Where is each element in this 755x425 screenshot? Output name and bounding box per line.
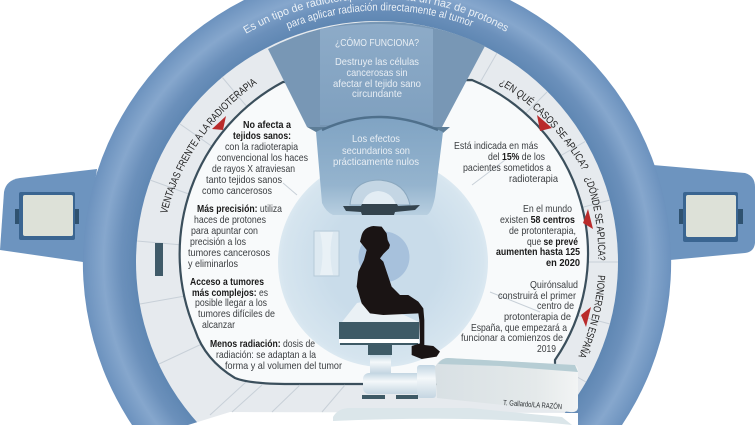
- text block: pioneer: construirá el primer: [498, 290, 576, 302]
- curved heading: cases: ¿EN QUÉ CASOS SE APLICA?: [499, 80, 588, 169]
- icon: red arrow left: [212, 116, 226, 130]
- text block: cases: radioterapia: [509, 173, 558, 185]
- text block: cases: [454, 140, 558, 185]
- text: how it works: Destruye las células: [335, 56, 419, 68]
- icon: red arrow where: [583, 209, 593, 229]
- text: side effects: prácticamente nulos: [333, 156, 419, 168]
- text block: where: [496, 203, 580, 269]
- floor lines: [232, 160, 540, 412]
- text block: cases: pacientes sometidos a: [463, 162, 551, 174]
- curved text: description: para aplicar radiación directamente al tumor: [286, 2, 474, 31]
- panel: how it works: [320, 24, 433, 125]
- text: how it works: circundante: [352, 88, 402, 100]
- text block: where: aumenten hasta 125: [496, 246, 580, 258]
- text block: advantages: para apuntar con: [191, 225, 258, 237]
- top wedge: [268, 22, 485, 127]
- text block: advantages: Menos radiación: dosis de: [210, 338, 315, 350]
- text block: advantages: tumores difíciles de: [198, 308, 275, 320]
- text block: pioneer: centro de: [537, 300, 574, 312]
- text block: advantages: [188, 119, 342, 372]
- text block: where: existen 58 centros: [500, 214, 575, 226]
- icon: red arrow pioneer: [581, 307, 591, 327]
- text block: advantages: tanto tejidos sanos: [206, 174, 282, 186]
- text block: advantages: con la radioterapia: [225, 141, 298, 153]
- treatment table: [339, 300, 419, 373]
- curved heading: advantages: VENTAJAS FRENTE A LA RADIOTERAPIA: [160, 79, 257, 212]
- text block: advantages: forma y al volumen del tumor: [225, 360, 342, 372]
- text: side effects: secundarios son: [342, 145, 410, 157]
- dark side block: [155, 243, 163, 276]
- text block: pioneer: Quirónsalud: [530, 279, 578, 291]
- patient silhouette: [357, 226, 440, 359]
- text block: advantages: radiación: se adaptan a la: [216, 349, 316, 361]
- pale central bore: [278, 157, 488, 367]
- heading: how it works: ¿CÓMO FUNCIONA?: [335, 36, 419, 49]
- bottom white floor cut: [188, 412, 578, 425]
- text block: advantages: como cancerosos: [202, 185, 272, 197]
- machine base: [333, 358, 578, 425]
- text block: advantages: y eliminarlos: [188, 258, 238, 270]
- text block: advantages: precisión a los: [190, 236, 246, 248]
- text: how it works: [333, 56, 421, 100]
- text: side effects: [333, 133, 419, 168]
- light inner ring: [136, 21, 618, 425]
- text block: pioneer: protonterapia de: [504, 311, 571, 323]
- text block: advantages: alcanzar: [202, 319, 235, 331]
- left side handle: [0, 169, 97, 262]
- right side handle: [653, 165, 755, 260]
- text block: advantages: de rayos X atraviesan: [212, 163, 295, 175]
- text: how it works: cancerosas sin: [346, 67, 408, 79]
- text: side effects: Los efectos: [352, 133, 400, 145]
- text block: advantages: Más precisión: utiliza: [197, 203, 282, 215]
- text: how it works: afectar el tejido sano: [333, 78, 421, 90]
- curved heading: pioneer: PIONERO EN ESPAÑA: [578, 276, 606, 358]
- text block: cases: Está indicada en más: [454, 140, 538, 152]
- text block: pioneer: funcionar a comienzos de: [461, 332, 563, 344]
- text block: advantages: posible llegar a los: [195, 297, 267, 309]
- text block: advantages: Acceso a tumores: [190, 276, 264, 288]
- icon: red arrow cases: [537, 115, 552, 131]
- text block: advantages: más complejos: es: [192, 287, 268, 299]
- curved heading: where: ¿DÓNDE SE APLICA?: [584, 178, 606, 260]
- nozzle housing: [307, 116, 450, 215]
- text block: pioneer: [461, 279, 578, 355]
- outer blue ring: [83, 0, 671, 425]
- credit: T. Gallardo/LA RAZÓN: [503, 398, 562, 411]
- text block: advantages: tejidos sanos:: [233, 130, 291, 142]
- white inner treatment chamber: [180, 80, 588, 384]
- text block: advantages: No afecta a: [243, 119, 291, 131]
- text block: advantages: haces de protones: [194, 214, 266, 226]
- round target behind head: [358, 232, 410, 282]
- text block: pioneer: España, que empezará a: [471, 322, 567, 334]
- text block: where: de protonterapia,: [509, 225, 576, 237]
- wall panel: [314, 231, 339, 276]
- text block: where: En el mundo: [523, 203, 572, 215]
- text block: advantages: convencional los haces: [217, 152, 308, 164]
- text block: cases: del 15% de los: [488, 151, 545, 163]
- text block: advantages: tumores cancerosos: [188, 247, 270, 259]
- text block: pioneer: 2019: [537, 343, 556, 355]
- text block: where: en 2020: [546, 257, 580, 269]
- text block: where: que se prevé: [527, 236, 578, 248]
